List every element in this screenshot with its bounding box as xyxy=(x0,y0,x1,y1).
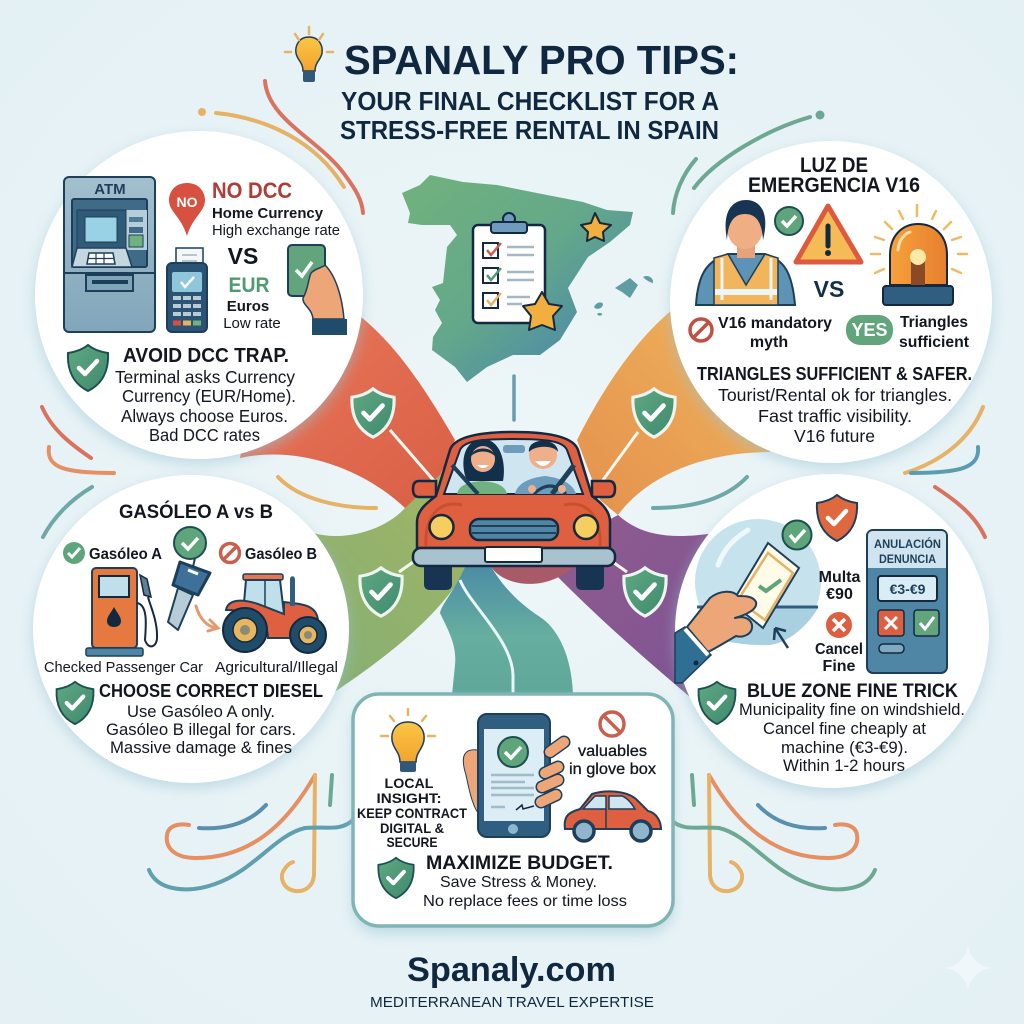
text: Multa 90: €90 xyxy=(826,586,853,603)
text: triangles sufficient xyxy=(899,314,970,351)
text: local insight xyxy=(357,775,467,850)
text: avoid DCC trap: Currency (EUR/Home). xyxy=(122,386,296,406)
tires xyxy=(424,565,604,590)
icon: shield xyxy=(699,682,735,724)
icon: prohibition xyxy=(600,712,624,736)
text: choose correct diesel xyxy=(99,681,323,757)
text: maximize budget: Save Stress & Money. xyxy=(440,874,597,891)
text: cancel fine xyxy=(815,641,863,675)
text: cancel fine: Fine xyxy=(823,658,856,675)
subtitle: YOUR FINAL CHECKLIST FOR A xyxy=(341,86,719,116)
panel: Gasoleo A vs B xyxy=(33,475,349,788)
footer brand: Spanaly.com xyxy=(407,951,616,989)
text: V16 mandatory myth: myth xyxy=(750,334,788,351)
badge: shield red band xyxy=(352,389,394,437)
sparkle mark xyxy=(945,945,991,991)
text: valuables in glove box xyxy=(569,743,656,778)
car with two occupants xyxy=(413,432,615,590)
icon: shield xyxy=(378,858,414,898)
text: avoid DCC trap: AVOID DCC TRAP. xyxy=(123,345,289,367)
heading: Luz de Emergencia V16: LUZ DE xyxy=(800,154,868,177)
badge: shield purple band xyxy=(624,568,666,616)
icon: warning triangle xyxy=(796,206,861,262)
icon: star south xyxy=(523,292,562,330)
text: V16 mandatory myth: V16 mandatory xyxy=(718,315,832,332)
panel: V16 emergency light xyxy=(670,141,992,468)
text: maximize budget xyxy=(423,853,627,910)
text: VS and EUR: VS xyxy=(228,243,258,269)
text: local insight: KEEP CONTRACT xyxy=(357,805,467,821)
band: purple xyxy=(556,515,740,697)
text: choose correct diesel: CHOOSE CORRECT DIESEL xyxy=(99,681,323,701)
bumper xyxy=(413,548,615,566)
icon: ATM: ATM xyxy=(94,181,126,198)
decorative swirl lines xyxy=(42,81,985,891)
text: VS and EUR xyxy=(223,243,281,332)
text: local insight: SECURE xyxy=(386,834,438,850)
icon: light bulb xyxy=(381,709,435,772)
text: local insight: INSIGHT: xyxy=(376,790,442,806)
badge: shield orange band xyxy=(633,389,675,437)
icon: shield xyxy=(68,345,108,391)
text: Multa 90 xyxy=(819,569,860,603)
arrow: key to tractor xyxy=(196,606,218,631)
mirrors xyxy=(413,481,615,497)
text: Multa 90: Multa xyxy=(819,569,860,586)
subtitle xyxy=(340,86,719,145)
text: valuables in glove box: in glove box xyxy=(569,761,656,778)
panel: blue zone fine xyxy=(675,474,989,793)
text: triangles sufficient and safer xyxy=(697,363,972,446)
band: teal road xyxy=(440,565,573,695)
text: pump and tractor captions xyxy=(44,659,338,676)
icon: NO pin xyxy=(169,183,205,236)
title xyxy=(285,27,739,145)
label: Gasoleo A xyxy=(63,542,162,564)
icon: windshield bubble with ticket and hand xyxy=(675,519,821,683)
text: blue zone fine trick: BLUE ZONE FINE TRICK xyxy=(747,681,958,702)
text: triangles sufficient and safer: TRIANGLES SUFFICIENT & SAFER. xyxy=(697,363,972,384)
icon: hand holding card xyxy=(288,245,347,335)
panel: DCC trap xyxy=(35,131,363,464)
hood shading xyxy=(426,504,600,548)
band: green xyxy=(250,470,467,695)
heading: Luz de Emergencia V16: EMERGENCIA V16 xyxy=(748,174,920,197)
icon: tractor xyxy=(223,574,326,653)
icon: orange beacon xyxy=(871,205,967,305)
heading: Spanaly Pro Tips: SPANALY PRO TIPS: xyxy=(344,37,739,83)
footer brand xyxy=(370,951,654,1011)
icon: payment machine: DENUNCIA xyxy=(879,552,936,566)
text: no DCC: High exchange rate xyxy=(212,222,340,239)
icon: person in safety vest xyxy=(696,200,795,305)
text: VS and EUR: EUR xyxy=(228,274,270,297)
text: VS and EUR: Low rate xyxy=(223,315,281,332)
heading: Luz de Emergencia V16 xyxy=(748,154,920,197)
text: blue zone fine trick: Municipality fine on windshield. xyxy=(739,700,965,719)
text: avoid DCC trap xyxy=(115,345,296,445)
text: pump and tractor captions: Checked Passenger Car xyxy=(44,659,203,676)
text: local insight: LOCAL xyxy=(384,775,434,791)
text: no DCC: NO DCC xyxy=(212,178,292,203)
text: triangles sufficient: sufficient xyxy=(899,334,970,351)
icon: clipboard checklist xyxy=(473,213,545,323)
text: no DCC xyxy=(212,178,340,239)
connector: map to car xyxy=(512,376,516,420)
text: maximize budget: No replace fees or time loss xyxy=(423,893,627,910)
Balearic islands xyxy=(594,276,653,316)
subtitle: STRESS-FREE RENTAL IN SPAIN xyxy=(340,115,719,145)
icon: car key xyxy=(168,527,210,630)
text: triangles sufficient and safer: Fast traffic visibility. xyxy=(758,406,912,426)
icon: red side-view car xyxy=(565,791,661,841)
label: Gasoleo B: Gasóleo B xyxy=(245,546,317,563)
band: orange xyxy=(577,310,770,515)
icon: check badge xyxy=(775,207,803,235)
map of Spain with checklist xyxy=(402,175,653,420)
text: VS: VS xyxy=(814,276,844,302)
icon: prohibition xyxy=(690,319,712,341)
panel: maximize budget xyxy=(353,694,673,933)
grille xyxy=(470,519,558,540)
band: red xyxy=(240,316,455,508)
headlights xyxy=(430,515,454,539)
badge: YES: YES xyxy=(851,320,888,340)
text: valuables in glove box: valuables xyxy=(578,743,647,760)
icon: payment machine: €3-€9 xyxy=(890,581,926,597)
text: triangles sufficient and safer: Tourist/Rental ok for triangles. xyxy=(718,385,952,405)
icon: orange shield xyxy=(817,495,857,541)
text: blue zone fine trick: machine (€3-€9). xyxy=(781,738,908,757)
text: choose correct diesel: Gasóleo B illegal for cars. xyxy=(106,720,296,739)
occupants xyxy=(452,439,576,494)
text: cancel fine: Cancel xyxy=(815,641,863,658)
text: no DCC: Home Currency xyxy=(212,205,324,222)
text: local insight: DIGITAL & xyxy=(380,820,444,836)
footer brand: MEDITERRANEAN TRAVEL EXPERTISE xyxy=(370,994,654,1011)
icon: cancel x xyxy=(826,612,852,638)
text: VS and EUR: Euros xyxy=(227,298,269,315)
icon: hand holding phone xyxy=(463,714,564,837)
icon: check badge xyxy=(782,520,812,550)
text: V16 mandatory myth xyxy=(718,315,832,351)
badge: YES xyxy=(846,315,893,345)
heading: Gasoleo A vs B: GASÓLEO A vs B xyxy=(119,501,273,523)
text: blue zone fine trick xyxy=(739,681,965,775)
text: avoid DCC trap: Bad DCC rates xyxy=(149,425,260,445)
text: choose correct diesel: Use Gasóleo A only. xyxy=(127,702,275,721)
license plate xyxy=(485,547,542,562)
text: blue zone fine trick: Within 1-2 hours xyxy=(783,756,905,775)
coloured flow bands xyxy=(240,310,770,697)
windshield xyxy=(444,439,583,494)
icon: fuel pump xyxy=(86,568,157,656)
badge: shield green band xyxy=(360,568,402,616)
label: Gasoleo A: Gasóleo A xyxy=(89,546,162,563)
icon: payment machine: ANULACIÓN xyxy=(874,536,941,551)
text: choose correct diesel: Massive damage & fines xyxy=(110,738,292,757)
text: avoid DCC trap: Terminal asks Currency xyxy=(115,367,295,387)
icon: NO pin: NO xyxy=(176,194,198,210)
text: triangles sufficient and safer: V16 future xyxy=(794,426,875,446)
icon: card terminal xyxy=(167,248,207,332)
band: maroon under car xyxy=(490,565,575,584)
icon: ATM xyxy=(64,177,156,332)
label: Gasoleo B xyxy=(220,544,317,563)
icon: title light bulb xyxy=(285,27,333,82)
text: avoid DCC trap: Always choose Euros. xyxy=(121,406,288,426)
text: maximize budget: MAXIMIZE BUDGET. xyxy=(426,853,613,874)
icon: shield xyxy=(57,682,93,724)
icon: payment machine xyxy=(867,530,947,673)
text: blue zone fine trick: Cancel fine cheaply at xyxy=(763,719,926,738)
body xyxy=(417,432,610,548)
text: triangles sufficient: Triangles xyxy=(900,314,968,331)
text: pump and tractor captions: Agricultural/Illegal xyxy=(215,659,338,676)
icon: star north-east xyxy=(581,213,611,241)
